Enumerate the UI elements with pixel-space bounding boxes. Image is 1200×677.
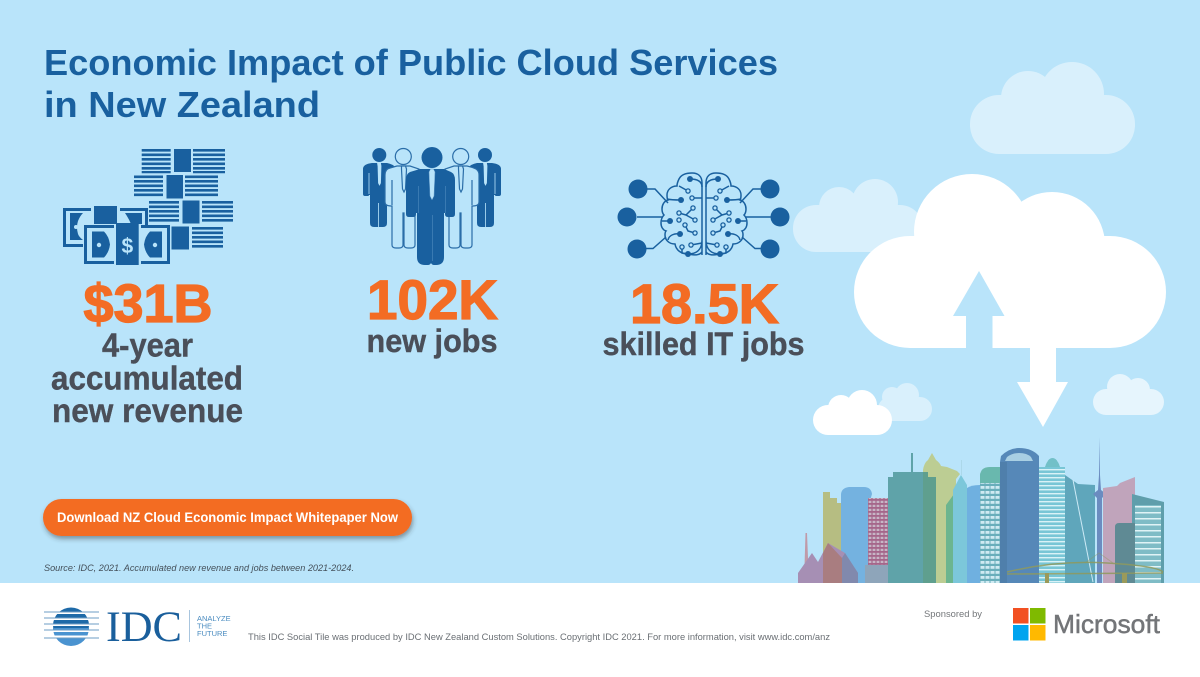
logo: IDC	[44, 604, 231, 651]
cloud: top light	[970, 62, 1135, 154]
outlined figure right	[445, 148, 479, 248]
arrow: download	[1017, 348, 1068, 427]
footer panel	[0, 583, 1200, 677]
call-to-action button	[43, 499, 412, 536]
dark figure right	[468, 148, 501, 227]
logo: IDC: FUTURE	[197, 629, 227, 638]
brain left half	[661, 173, 702, 257]
logo: Microsoft	[1013, 608, 1161, 640]
stat: new jobs	[366, 268, 498, 359]
brain right half	[706, 173, 747, 257]
icon: brain network	[618, 173, 790, 258]
call-to-action button: Download NZ Cloud Economic Impact Whitepaper Now	[57, 510, 398, 525]
logo: IDC: ANALYZE	[197, 614, 231, 623]
title	[44, 42, 778, 125]
cloud: small pale	[878, 383, 932, 421]
skyline	[798, 437, 1164, 583]
cloud: small right	[1093, 374, 1164, 415]
centre figure	[406, 147, 455, 265]
source note: Source: IDC, 2021. Accumulated new revenue and jobs between 2021-2024.	[44, 563, 354, 574]
stat: skilled IT jobs	[602, 272, 804, 362]
outlined figure left	[385, 148, 419, 248]
stat: revenue	[51, 274, 243, 429]
sponsor label: Sponsored by	[924, 609, 982, 620]
logo: IDC: THE	[197, 622, 212, 630]
logo: IDC: IDC	[106, 604, 182, 651]
icon: money stacks	[63, 149, 233, 265]
stat: skilled IT jobs: 18.5K	[630, 272, 779, 335]
logo: Microsoft: Microsoft	[1053, 609, 1161, 639]
stat: revenue: 4-year	[102, 326, 193, 364]
stat: skilled IT jobs: skilled IT jobs	[602, 326, 804, 362]
cloud: large white with upload arrow	[854, 174, 1166, 348]
arrow: upload	[953, 271, 1004, 348]
cloud: left light	[793, 179, 923, 252]
dark figure left	[363, 148, 396, 227]
footer credit: This IDC Social Tile was produced by IDC New Zealand Custom Solutions. Copyright IDC 2021. For more information, visit www.idc.com/anz	[248, 632, 830, 643]
stat: revenue: $31B	[84, 274, 212, 334]
cloud: small white	[813, 390, 892, 435]
icon: money stacks: $	[122, 235, 134, 258]
title: in New Zealand	[44, 84, 320, 125]
title: Economic Impact of Public Cloud Services	[44, 42, 778, 83]
stat: new jobs: 102K	[367, 268, 498, 331]
stat: revenue: new revenue	[52, 392, 243, 429]
stat: new jobs: new jobs	[366, 323, 498, 359]
icon: people	[363, 147, 501, 265]
stat: revenue: accumulated	[51, 360, 243, 396]
